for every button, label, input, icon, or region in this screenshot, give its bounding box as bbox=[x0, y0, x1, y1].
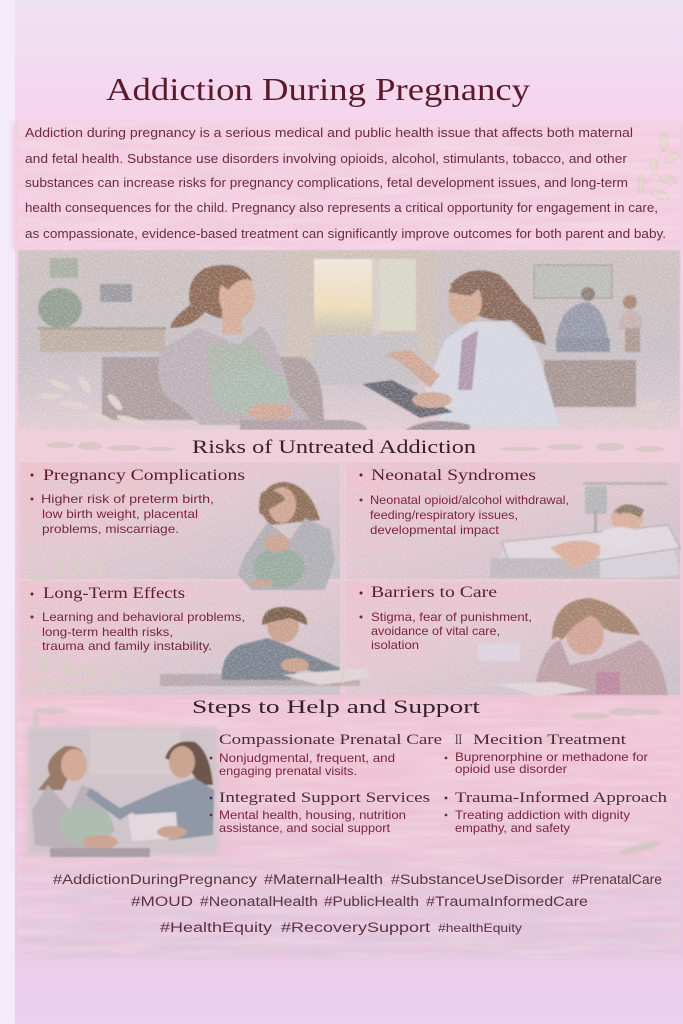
watery texture over lower page bbox=[18, 700, 680, 958]
step: compassionate prenatal care bbox=[210, 732, 442, 778]
hashtags: #TraumaInformedCare bbox=[426, 894, 588, 909]
figure: woman with hand on chest bbox=[238, 482, 335, 590]
heading: barriers to care: Barriers to Care bbox=[371, 584, 497, 601]
leaf band right of heading bbox=[500, 443, 664, 452]
panel: steps illustration bbox=[28, 727, 218, 857]
hashtags: #HealthEquity bbox=[160, 920, 272, 935]
left page margin bbox=[0, 0, 15, 1024]
heading: neonatal syndromes: Neonatal Syndromes bbox=[371, 467, 536, 484]
risk panels speckle bbox=[20, 463, 680, 695]
step: trauma-informed approach: Trauma-Informed Approach bbox=[455, 790, 668, 806]
icon: leaf spray top right bbox=[630, 133, 681, 202]
text: long-term effects: trauma and family instability. bbox=[42, 639, 212, 653]
lower panel background bbox=[18, 430, 683, 958]
step: compassionate prenatal care: Nonjudgmental, frequent, and bbox=[219, 751, 395, 765]
intro text block: health consequences for the child. Pregnancy also represents a critical opportunity for engagement in care, bbox=[25, 200, 658, 215]
step: integrated support services: Integrated Support Services bbox=[219, 790, 430, 806]
step: medication treatment: Mecition Treatment bbox=[473, 732, 627, 748]
step: trauma-informed approach bbox=[445, 790, 668, 835]
panel: neonatal syndromes bbox=[346, 463, 680, 579]
figure: pregnant woman bbox=[32, 746, 150, 857]
leaf spray scene left bbox=[38, 374, 144, 427]
intro text block: and fetal health. Substance use disorders involving opioids, alcohol, stimulants, tobacco, and other bbox=[25, 151, 628, 166]
scene speckle texture bbox=[18, 250, 680, 430]
heading: long-term effects: Long-Term Effects bbox=[43, 585, 185, 602]
leaf sprays beside steps heading bbox=[32, 708, 662, 858]
intro text block: Addiction during pregnancy is a serious medical and public health issue that affects both maternal bbox=[25, 125, 633, 140]
step: integrated support services bbox=[210, 790, 430, 835]
window bbox=[285, 250, 435, 385]
background picture and people bbox=[534, 265, 642, 352]
step: integrated support services: Mental health, housing, nutrition bbox=[219, 808, 406, 822]
shelf and plant bbox=[38, 258, 166, 352]
scene backdrop bbox=[18, 250, 680, 430]
hashtags: #PublicHealth bbox=[324, 894, 419, 909]
step: medication treatment: Buprenorphine or methadone for bbox=[455, 750, 648, 764]
text: long-term effects bbox=[30, 610, 245, 653]
figure: infant in crib bbox=[490, 482, 680, 578]
text: barriers to care: isolation bbox=[371, 638, 419, 652]
hashtags: #SubstanceUseDisorder bbox=[391, 872, 565, 887]
hashtags: #MOUD bbox=[131, 894, 193, 909]
text: neonatal syndromes: feeding/respiratory issues, bbox=[370, 508, 518, 522]
text: barriers to care: avoidance of vital care, bbox=[371, 624, 500, 638]
step: compassionate prenatal care: engaging prenatal visits. bbox=[219, 764, 357, 778]
text: barriers to care: Stigma, fear of punishment, bbox=[371, 610, 532, 624]
watery texture over intro bbox=[18, 122, 680, 250]
hashtags bbox=[53, 872, 662, 935]
intro text block: as compassionate, evidence-based treatment can significantly improve outcomes for both parent and baby. bbox=[25, 226, 666, 241]
divider between risk columns bbox=[342, 463, 344, 683]
step: compassionate prenatal care: Compassionate Prenatal Care bbox=[219, 732, 442, 748]
step: integrated support services: assistance, and social support bbox=[219, 821, 391, 835]
intro panel background bbox=[12, 122, 683, 250]
panel: barriers to care bbox=[346, 582, 680, 695]
figure: nurse with tablet bbox=[86, 741, 214, 841]
leaf spray scene right bbox=[616, 398, 665, 430]
text: pregnancy complications: low birth weight, placental bbox=[42, 507, 198, 521]
text: long-term effects: long-term health risks, bbox=[42, 625, 173, 639]
hashtags: #PrenatalCare bbox=[572, 872, 662, 887]
text: neonatal syndromes: developmental impact bbox=[370, 523, 500, 537]
leaf band left of heading bbox=[46, 442, 176, 451]
panel: long-term effects bbox=[20, 582, 340, 695]
panel: pregnancy complications bbox=[20, 463, 340, 579]
step: medication treatment: opioid use disorder bbox=[455, 762, 567, 776]
sofa left bbox=[102, 357, 324, 420]
step: trauma-informed approach: empathy, and safety bbox=[455, 821, 570, 835]
leaf spray: pregnancy complications bbox=[30, 555, 107, 581]
hashtags: #healthEquity bbox=[438, 921, 522, 935]
heading: steps: Steps to Help and Support bbox=[192, 697, 481, 718]
figure: distressed woman at desk bbox=[478, 598, 668, 697]
text: pregnancy complications: problems, miscarriage. bbox=[42, 522, 179, 536]
heading: pregnancy complications: Pregnancy Complications bbox=[43, 467, 245, 484]
hashtags: #NeonatalHealth bbox=[200, 894, 318, 909]
step: medication treatment: II bbox=[455, 732, 462, 748]
grey mottling over lower page bbox=[18, 860, 680, 958]
risk panels mottling bbox=[20, 463, 680, 695]
hashtags: #MaternalHealth bbox=[264, 872, 383, 887]
hashtags: #RecoverySupport bbox=[281, 920, 430, 935]
sofa right bbox=[544, 360, 636, 407]
text: barriers to care bbox=[360, 610, 532, 652]
intro text block: substances can increase risks for pregnancy complications, fetal development issues, and long-term bbox=[25, 175, 628, 190]
heading band bbox=[18, 430, 680, 462]
text: long-term effects: Learning and behavioral problems, bbox=[42, 610, 245, 624]
doctor seated right bbox=[362, 270, 560, 430]
step: trauma-informed approach: Treating addiction with dignity bbox=[455, 808, 630, 822]
text: neonatal syndromes: Neonatal opioid/alcohol withdrawal, bbox=[370, 493, 569, 507]
text: pregnancy complications bbox=[30, 492, 214, 536]
heading: risks: Risks of Untreated Addiction bbox=[192, 437, 477, 458]
background wall detail bbox=[90, 730, 180, 775]
intro text block bbox=[25, 125, 666, 241]
risk panels grey texture behind figures bbox=[20, 463, 680, 695]
title: Addiction During Pregnancy bbox=[106, 71, 530, 107]
leaf spray: long-term effects bbox=[34, 655, 127, 690]
figure: man writing at desk bbox=[160, 607, 370, 686]
hashtags: #AddictionDuringPregnancy bbox=[53, 872, 257, 887]
text: neonatal syndromes bbox=[360, 493, 569, 537]
illustration: counselling scene bbox=[18, 250, 680, 430]
woman seated left bbox=[158, 265, 368, 430]
step: medication treatment bbox=[445, 732, 648, 776]
text: pregnancy complications: Higher risk of preterm birth, bbox=[41, 492, 214, 506]
